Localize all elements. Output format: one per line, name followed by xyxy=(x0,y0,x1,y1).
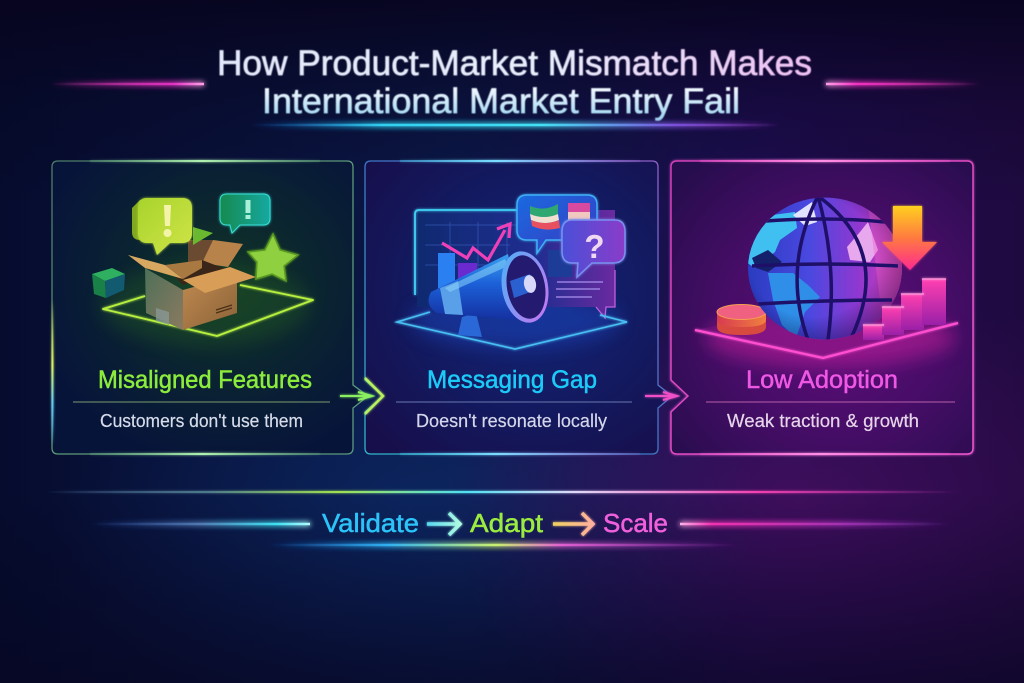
title underline xyxy=(250,124,780,126)
icon: small alert bubble xyxy=(220,194,270,233)
panel: low adoption xyxy=(671,161,973,454)
icon: floor glow xyxy=(410,292,620,348)
title right accent line xyxy=(826,83,980,85)
subtext: messaging gap: Doesn't resonate locally xyxy=(416,411,607,431)
icon: megaphone xyxy=(429,248,554,337)
icon: small cube xyxy=(92,268,125,298)
icon: floor glow xyxy=(705,310,955,366)
icon: bars falling chart xyxy=(863,279,946,340)
card frame xyxy=(365,161,672,454)
divider xyxy=(706,401,955,403)
text: scale: Scale xyxy=(603,508,668,538)
heading: messaging gap: Messaging Gap xyxy=(427,366,597,394)
footer right line xyxy=(680,523,950,525)
icon: platform outline xyxy=(103,285,313,336)
icon: trend line xyxy=(442,224,510,260)
card frame xyxy=(671,161,973,454)
subtext: low adoption: Weak traction & growth xyxy=(727,411,919,431)
footer flow: validate adapt scale xyxy=(322,508,668,538)
footer lower line xyxy=(270,544,740,546)
panel: misaligned features xyxy=(52,161,372,454)
icon: globe xyxy=(746,196,905,340)
icon: large alert bubble xyxy=(132,198,192,255)
subtext: misaligned features: Customers don't use them xyxy=(100,411,303,431)
title xyxy=(217,44,812,121)
icon: question bubble: ? xyxy=(584,228,605,265)
icon: platform outline xyxy=(695,323,958,358)
title: International Market Entry Fail xyxy=(262,82,740,121)
footer top line xyxy=(45,491,960,493)
title left accent line xyxy=(50,83,204,85)
divider xyxy=(73,401,330,403)
footer left line xyxy=(90,523,310,525)
divider xyxy=(396,401,632,403)
icon: platform surface xyxy=(695,318,958,358)
arrow: messaging to adoption xyxy=(645,392,677,400)
heading: misaligned features: Misaligned Features xyxy=(98,366,312,394)
icon: coins xyxy=(717,304,766,335)
icon: flag bubble xyxy=(517,195,597,253)
title: How Product-Market Mismatch Makes xyxy=(217,44,812,83)
icon: chart panel xyxy=(415,210,615,318)
icon: down arrow xyxy=(882,206,937,270)
text: validate: Validate xyxy=(322,508,419,538)
icon: star xyxy=(248,234,298,281)
icon: platform outline xyxy=(397,312,627,349)
heading: low adoption: Low Adoption xyxy=(746,366,898,394)
panel: messaging gap xyxy=(365,161,677,454)
icon: green triangle xyxy=(193,227,213,245)
icon: open cardboard box xyxy=(128,240,256,330)
arrow: features to messaging xyxy=(340,392,372,400)
arrow: adapt to scale xyxy=(553,513,593,535)
text: adapt: Adapt xyxy=(470,508,544,538)
arrow: validate to adapt xyxy=(427,513,460,535)
icon: green floor glow xyxy=(100,265,310,345)
card frame xyxy=(52,161,368,454)
icon: question bubble xyxy=(562,220,625,277)
